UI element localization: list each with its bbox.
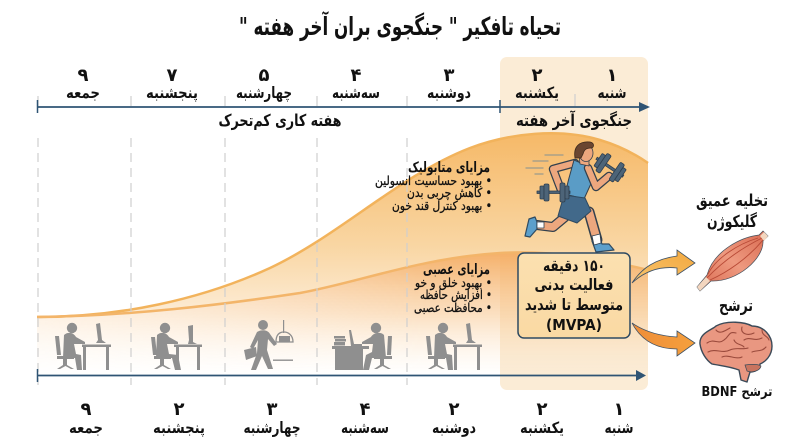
top axis xyxy=(37,100,650,113)
text block: metabolic benefits: مزایای متابولیک xyxy=(408,160,490,176)
label: BDNF secretion: ترشح BDNF xyxy=(702,384,772,400)
top day labels: ۴ xyxy=(350,65,362,86)
label: glycogen depletion xyxy=(696,191,768,232)
top day labels: پنجشنبه xyxy=(146,84,198,103)
icon: person at desk with books, Tuesday xyxy=(332,323,392,370)
callout: 150 minutes MVPA: (MVPA) xyxy=(546,316,602,334)
bottom axis xyxy=(37,369,646,382)
bottom day labels: دوشنبه xyxy=(432,419,476,437)
text block: metabolic benefits: • کاهش چربی بدن xyxy=(407,185,492,201)
top day labels: ۵ xyxy=(258,65,270,86)
icon: person at desk, Friday xyxy=(55,323,111,370)
label: glycogen depletion: تخلیه عمیق xyxy=(696,191,768,211)
callout: 150 minutes MVPA: ۱۵۰ دقیقه xyxy=(543,256,605,275)
callout: 150 minutes MVPA: فعالیت بدنی xyxy=(534,275,614,294)
icon: runner with dumbbells xyxy=(525,142,629,252)
top day labels: ۱ xyxy=(606,65,618,86)
icon: muscle xyxy=(697,231,768,291)
icon: person at desk, Thursday xyxy=(151,323,202,370)
text block: neural benefits: • بهبود خلق و خو xyxy=(414,275,492,291)
text block: metabolic benefits xyxy=(375,160,492,214)
title: تحیاه تافکیر " جنگجوی بران آخر هفته " xyxy=(239,11,561,42)
label: glycogen depletion: گلیکوژن xyxy=(707,211,757,232)
chart: benefit curves xyxy=(37,133,648,375)
top day labels: سه‌شنبه xyxy=(332,84,380,102)
top day labels: شنبه xyxy=(598,84,626,102)
arrow: to muscle xyxy=(632,250,695,283)
bottom day labels: ۲ xyxy=(536,399,548,420)
bottom day labels: ۹ xyxy=(80,399,92,420)
area: neural benefits xyxy=(37,254,648,362)
top day labels: ۷ xyxy=(166,65,178,86)
top day labels xyxy=(66,65,626,103)
top day labels: ۳ xyxy=(444,65,454,86)
bottom day labels: جمعه xyxy=(69,419,103,437)
text block: neural benefits: • محافظت عصبی xyxy=(414,300,492,315)
text block: neural benefits: • افزایش حافظه xyxy=(420,287,492,303)
bottom day labels xyxy=(69,399,634,438)
bottom day labels: چهارشنبه xyxy=(244,419,300,438)
text block: metabolic benefits: • بهبود حساسیت انسولین xyxy=(375,173,492,189)
bottom day labels: پنجشنبه xyxy=(153,419,205,438)
bottom day labels: ۴ xyxy=(360,399,370,420)
callout: 150 minutes MVPA: متوسط تا شدید xyxy=(525,295,623,314)
bottom day labels: ۲ xyxy=(174,399,184,420)
top day labels: جمعه xyxy=(66,84,100,102)
callout: 150 minutes MVPA xyxy=(518,253,630,338)
panel: weekend warrior highlight xyxy=(500,57,648,390)
bottom day labels: ۲ xyxy=(448,399,460,420)
bottom day labels: ۳ xyxy=(266,399,278,420)
bottom day labels: شنبه xyxy=(604,419,634,437)
text block: neural benefits xyxy=(414,262,492,315)
label: secretion: ترشح xyxy=(719,296,753,316)
top day labels: ۹ xyxy=(78,65,88,86)
top day labels: چهارشنبه xyxy=(236,84,292,103)
icon: person at desk, Monday xyxy=(426,323,482,370)
curve: neural xyxy=(37,252,648,317)
icon: brain xyxy=(700,322,772,382)
curve: metabolic xyxy=(37,133,648,317)
bottom day labels: ۱ xyxy=(614,399,624,420)
bottom day labels: یکشنبه xyxy=(520,419,564,437)
text block: metabolic benefits: • بهبود کنترل قند خون xyxy=(392,198,492,214)
heading: weekend warrior: جنگجوی آخر هفته xyxy=(516,109,632,131)
icon: walking person, Wednesday xyxy=(244,320,293,370)
top day labels: دوشنبه xyxy=(427,84,471,102)
arrow: to brain xyxy=(632,323,695,356)
bottom day labels: سه‌شنبه xyxy=(341,419,389,437)
heading: sedentary work week: هفته کاری کم‌تحرک xyxy=(218,111,342,131)
top day labels: یکشنبه xyxy=(515,84,559,102)
top day labels: ۲ xyxy=(532,65,542,86)
text block: neural benefits: مزایای عصبی xyxy=(423,262,490,278)
area: metabolic benefits xyxy=(37,133,648,317)
